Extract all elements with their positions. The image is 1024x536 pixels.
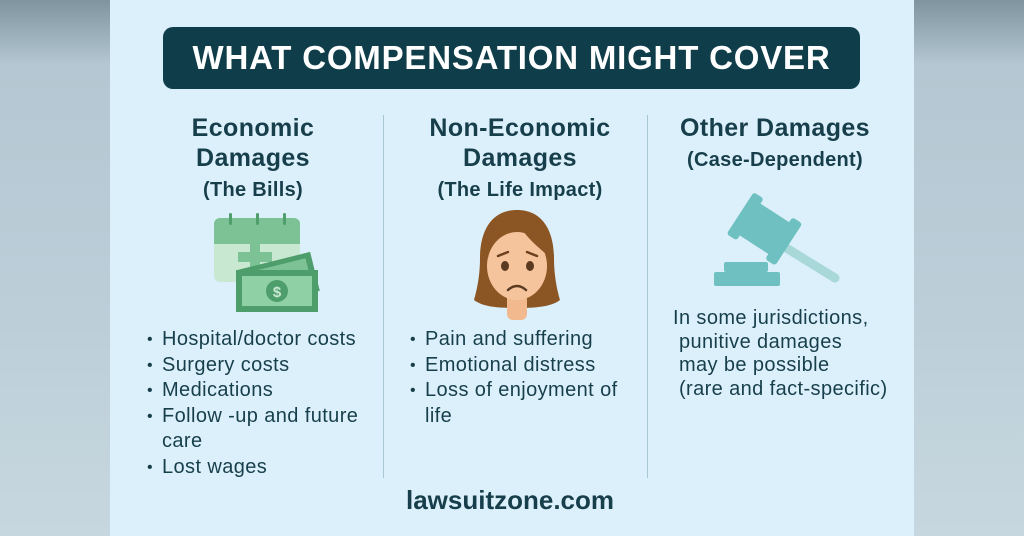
- footer: lawsuitzone.com: [406, 485, 614, 515]
- text: other: In some jurisdictions,: [673, 307, 869, 329]
- list: economic: Lost wages: [162, 456, 267, 478]
- list: economic: [148, 328, 358, 478]
- heading: non-economic: Damages: [463, 144, 577, 172]
- icon: worried face: [474, 210, 560, 320]
- list: non-economic: Emotional distress: [425, 354, 596, 376]
- heading: other: [680, 114, 870, 171]
- panel: main: [110, 0, 914, 536]
- text: other: (rare and fact-specific): [679, 378, 888, 400]
- list: economic: Follow -up and future care: [162, 404, 358, 452]
- heading: economic: (The Bills): [203, 179, 303, 201]
- heading: other: (Case-Dependent): [687, 149, 863, 171]
- list: economic: Medications: [162, 379, 273, 401]
- heading: non-economic: (The Life Impact): [437, 179, 603, 201]
- list: non-economic: Loss of enjoyment of life: [425, 379, 618, 426]
- icon: calendar and money: [214, 213, 320, 312]
- title: WHAT COMPENSATION MIGHT COVER: [193, 39, 830, 76]
- heading: economic: Economic: [192, 114, 314, 142]
- heading: non-economic: Non-Economic: [429, 114, 611, 142]
- list: non-economic: [410, 328, 618, 426]
- title: [163, 27, 860, 89]
- icon: gavel: [714, 193, 840, 286]
- heading: economic: Damages: [196, 144, 310, 172]
- heading: economic: [192, 114, 314, 201]
- list: non-economic: Pain and suffering: [425, 328, 593, 350]
- text: other: may be possible: [679, 354, 829, 376]
- text: other: punitive damages: [679, 330, 842, 352]
- list: economic: Hospital/doctor costs: [162, 328, 356, 350]
- heading: other: Other Damages: [680, 114, 870, 142]
- icon: calendar and money: $: [273, 284, 282, 301]
- list: economic: Surgery costs: [162, 354, 289, 376]
- text: other: [673, 307, 888, 400]
- heading: non-economic: [429, 114, 611, 201]
